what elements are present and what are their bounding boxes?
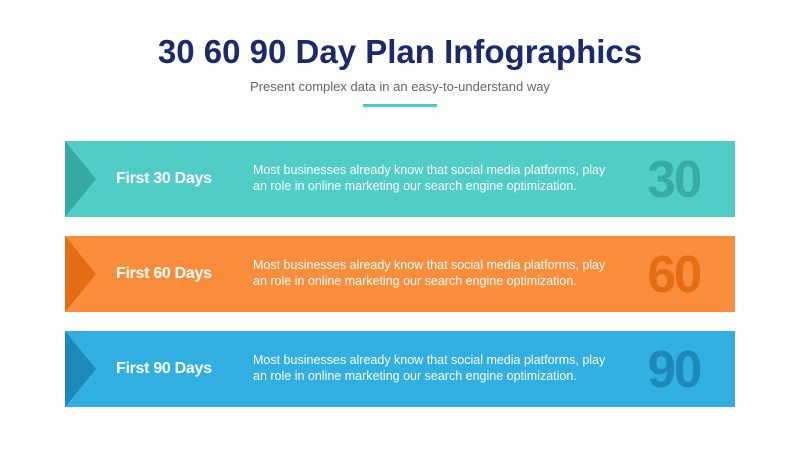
label: First 60 Days [116,265,212,282]
description: an role in online marketing our search engine optimization. [253,178,577,192]
icon: arrow [65,331,96,407]
description: an role in online marketing our search engine optimization. [253,368,577,382]
description [253,163,606,192]
description: an role in online marketing our search engine optimization. [253,274,577,288]
underline accent [363,104,437,107]
title: 30 60 90 Day Plan Infographics [158,33,642,70]
panel: first 90 days [65,331,735,407]
description: Most businesses already know that social media platforms, play [253,353,605,367]
panel: first 60 days [65,236,735,312]
description [253,258,606,288]
label: First 30 Days [116,170,212,187]
icon: arrow [65,141,96,217]
description: Most businesses already know that social media platforms, play [253,258,605,272]
number: 60 [648,246,700,304]
icon: arrow [65,236,96,312]
number: 90 [648,341,700,399]
number: 30 [648,151,700,209]
subtitle: Present complex data in an easy-to-understand way [250,79,550,94]
description: Most businesses already know that social media platforms, play [253,163,605,177]
label: First 90 Days [116,360,212,377]
panel: first 30 days [65,141,735,217]
description [253,353,606,382]
